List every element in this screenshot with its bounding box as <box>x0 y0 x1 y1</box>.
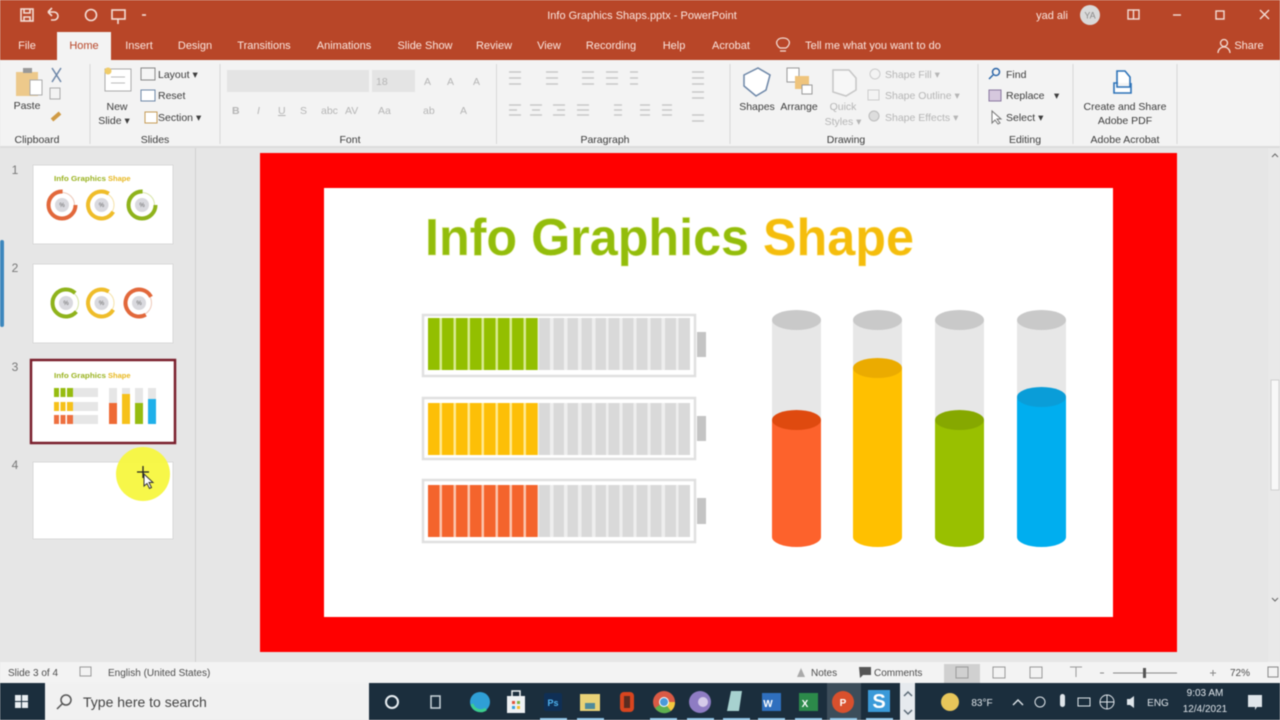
ribbon tabs: Transitions <box>237 40 291 52</box>
thumbnail 2 <box>33 264 173 343</box>
search box: Type here to search <box>83 694 207 710</box>
editing group: Editing <box>1009 134 1041 146</box>
slides group: Layout ▾ <box>158 69 198 81</box>
drawing group: Styles ▾ <box>825 116 862 128</box>
clipboard group: Clipboard <box>15 134 60 146</box>
slide white canvas <box>324 188 1113 617</box>
taskbar apps <box>386 683 893 720</box>
ribbon tabs: Home <box>69 40 99 52</box>
drawing group: Quick <box>830 101 857 113</box>
slides group: Reset <box>158 90 186 102</box>
window controls <box>1128 10 1269 19</box>
slide red background <box>260 153 1177 652</box>
status bar: Slide 3 of 4 <box>8 668 58 679</box>
font group: Font <box>339 134 361 146</box>
slides group: Section ▾ <box>158 112 202 124</box>
font group: I <box>257 105 260 117</box>
thumbnail 3 selected: Shape <box>108 371 131 380</box>
drawing group <box>739 68 960 146</box>
system tray <box>941 688 1262 715</box>
font group: A <box>473 76 480 88</box>
thumbnail 2: % <box>63 301 69 307</box>
account avatar <box>1080 5 1100 25</box>
thumbnail 2: % <box>136 301 142 307</box>
drawing group: Shape Fill ▾ <box>885 69 941 81</box>
title: Info Graphics Shape: Shape <box>763 209 914 267</box>
thumbnail 3 selected <box>31 360 175 443</box>
ribbon tabs: Help <box>663 40 685 52</box>
editing group: ▾ <box>1054 90 1060 102</box>
adobe acrobat group: Create and Share <box>1084 101 1167 113</box>
font group: AV <box>345 105 358 117</box>
thumbnail 3 selected: Info Graphics <box>54 371 106 380</box>
ribbon tabs: Review <box>476 40 512 52</box>
slides group: Slide ▾ <box>98 115 130 127</box>
ribbon tabs: Acrobat <box>712 40 750 52</box>
taskbar <box>0 683 1280 720</box>
font group: abc <box>321 105 338 117</box>
thumbnail 1: % <box>59 203 65 209</box>
system tray: 12/4/2021 <box>1183 704 1228 715</box>
thumbnail 1: Shape <box>108 174 131 183</box>
font group: U <box>278 105 286 117</box>
font group: A <box>460 105 467 117</box>
quick access toolbar <box>21 8 146 24</box>
drawing group: Shapes <box>739 101 775 113</box>
font group <box>227 70 480 146</box>
taskbar apps: P <box>840 698 847 709</box>
document title: Info Graphics Shaps.pptx - PowerPoint <box>547 10 737 22</box>
status bar: English (United States) <box>108 668 210 679</box>
battery 2: yellow <box>423 398 706 459</box>
status bar <box>0 662 1280 683</box>
ribbon tabs: Recording <box>586 40 636 52</box>
ribbon tabs: File <box>18 40 36 52</box>
battery 1: green <box>423 315 706 376</box>
slide thumbnail panel: 1 <box>12 163 19 177</box>
slide thumbnail panel <box>0 148 196 662</box>
adobe acrobat group <box>1084 71 1167 146</box>
title: Info Graphics Shape <box>425 209 914 267</box>
slides group: Slides <box>141 134 169 146</box>
editing group: Replace <box>1006 90 1045 102</box>
drawing group: Shape Effects ▾ <box>885 112 959 124</box>
thumbnail 1 <box>33 165 173 244</box>
title bar <box>0 0 1280 60</box>
system tray: 83°F <box>971 698 993 709</box>
active home tab <box>57 32 111 61</box>
adobe acrobat group: Adobe Acrobat <box>1091 134 1160 146</box>
font group: A <box>424 76 431 88</box>
editing group <box>989 68 1060 146</box>
ribbon <box>0 60 1280 148</box>
battery 3: orange <box>423 480 706 542</box>
font group: Aa <box>378 105 391 117</box>
clipboard group <box>14 68 61 146</box>
thumbnail 4 <box>33 462 173 539</box>
drawing group: Shape Outline ▾ <box>885 90 960 102</box>
slides group <box>98 68 202 146</box>
vertical scrollbar <box>1268 148 1280 662</box>
view buttons <box>944 664 1082 683</box>
adobe acrobat group: Adobe PDF <box>1098 115 1152 127</box>
account avatar: YA <box>1084 10 1096 20</box>
font group: A <box>447 76 454 88</box>
start button <box>15 695 28 708</box>
system tray: 9:03 AM <box>1187 688 1223 699</box>
ribbon tabs <box>18 32 1264 61</box>
slide thumbnail panel: 4 <box>12 458 19 472</box>
search box <box>45 683 369 720</box>
drawing group: Arrange <box>780 101 818 113</box>
font group: ab <box>423 105 435 117</box>
thumbnail 1: % <box>139 203 145 209</box>
ribbon tabs: Insert <box>125 40 153 52</box>
editing group: Find <box>1006 69 1027 81</box>
cylinder 2: yellow <box>853 310 902 547</box>
thumbnail 1: Info Graphics <box>54 174 106 183</box>
account name: yad ali <box>1036 10 1068 22</box>
panel scroll indicator <box>0 240 4 327</box>
ribbon tabs: Design <box>178 40 212 52</box>
cylinder 3: green <box>935 310 984 547</box>
ribbon tabs: View <box>537 40 561 52</box>
ribbon tabs: Slide Show <box>397 40 453 52</box>
status bar: Notes <box>811 668 837 679</box>
status bar: Comments <box>874 668 922 679</box>
paragraph group: Paragraph <box>580 134 630 146</box>
editing group: Select ▾ <box>1006 112 1044 124</box>
cylinder 1: orange <box>772 310 821 547</box>
ribbon tabs: Tell me what you want to do <box>805 40 941 52</box>
clipboard group: Paste <box>14 100 41 112</box>
ribbon tabs: Share <box>1234 40 1264 52</box>
font group: B <box>232 105 240 117</box>
drawing group: Drawing <box>827 134 865 146</box>
zoom slider <box>1100 667 1278 679</box>
thumbnail 1: % <box>99 203 105 209</box>
cylinder 4: blue <box>1017 310 1066 547</box>
title: Info Graphics Shape: Info Graphics <box>425 209 749 267</box>
slide thumbnail panel: 2 <box>12 261 19 275</box>
thumbnail 2: % <box>99 301 105 307</box>
font group: S <box>300 105 307 117</box>
zoom slider: 72% <box>1230 668 1250 679</box>
slides group: New <box>106 101 128 113</box>
system tray: ENG <box>1147 698 1169 709</box>
slide thumbnail panel: 3 <box>12 360 19 374</box>
taskbar chevrons <box>900 683 915 720</box>
taskbar apps: X <box>802 699 809 710</box>
font group: 18 <box>376 76 388 88</box>
taskbar apps: W <box>763 699 773 710</box>
taskbar apps: Ps <box>547 698 559 708</box>
taskbar apps: S <box>872 691 886 713</box>
paragraph group <box>509 72 704 146</box>
ribbon tabs: Animations <box>317 40 372 52</box>
cursor highlight <box>116 447 170 501</box>
